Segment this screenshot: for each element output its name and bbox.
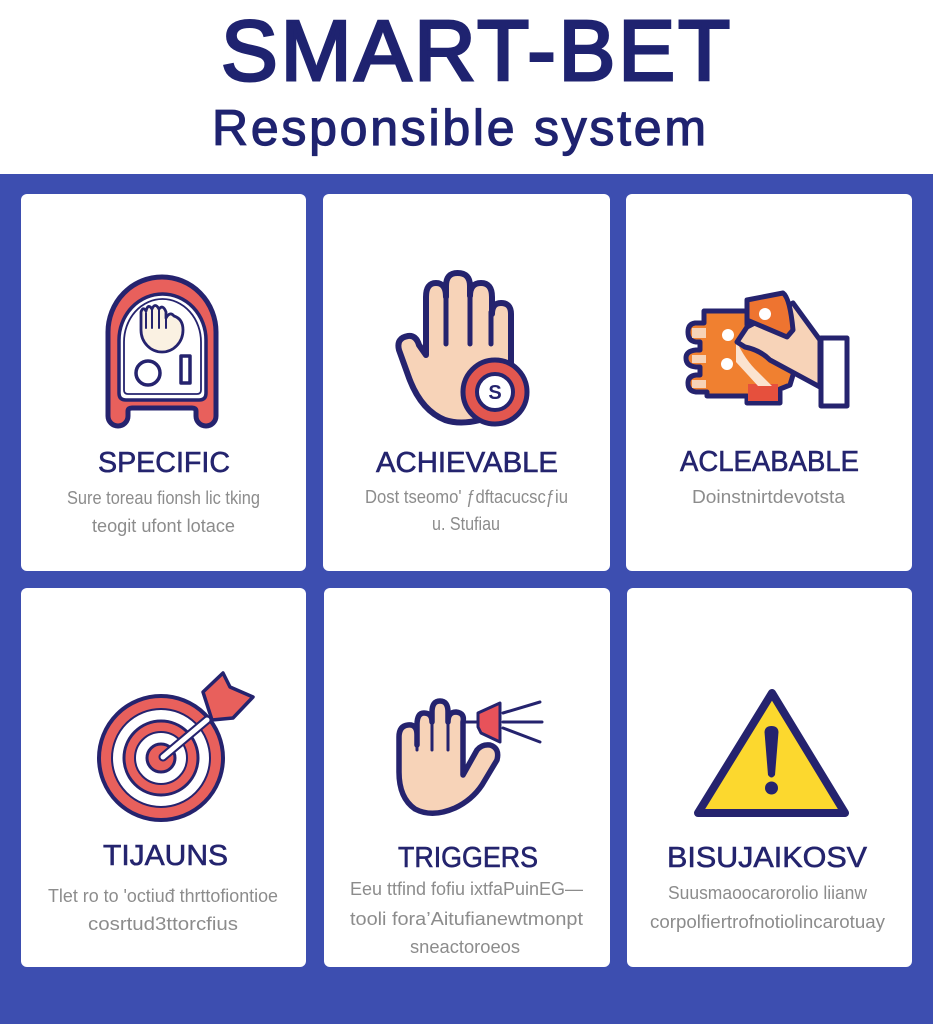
icon: slot machine with hand bbox=[108, 277, 216, 426]
heading: TRIGGERS bbox=[398, 842, 538, 874]
icon: hand with chip bbox=[398, 273, 527, 424]
description: sneactoroeos bbox=[410, 937, 520, 957]
panel: triggers bbox=[324, 588, 610, 967]
panel: warning bbox=[627, 588, 912, 967]
heading: ACHIEVABLE bbox=[376, 447, 558, 479]
panel: target bbox=[21, 588, 306, 967]
description: Tlet ro to 'octiuđ thrttofiontioe bbox=[48, 886, 278, 906]
description bbox=[650, 883, 885, 932]
description: cosrtud3ttorcfius bbox=[88, 914, 238, 934]
description bbox=[365, 487, 568, 534]
heading: TIJAUNS bbox=[103, 840, 228, 872]
panel: specific bbox=[21, 194, 306, 571]
icon: fist gripping chip bbox=[686, 293, 847, 406]
panel: achievable bbox=[323, 194, 610, 571]
description: corpolfiertrofnotiolincarotuay bbox=[650, 912, 885, 932]
title: SMART-BET bbox=[221, 4, 730, 99]
description: Suusmaoocarorolio liianw bbox=[668, 883, 868, 903]
description: Eeu ttfind fofiu ixtfaPuinEG— bbox=[350, 879, 583, 899]
subtitle: Responsible system bbox=[212, 100, 706, 156]
heading: ACLEABABLE bbox=[680, 446, 859, 478]
description bbox=[67, 488, 260, 536]
description: Sure toreau fionsh lic tking bbox=[67, 488, 260, 508]
icon: hand with megaphone bbox=[399, 701, 542, 813]
panel: actionable bbox=[626, 194, 912, 571]
icon: warning triangle bbox=[698, 693, 845, 813]
description: Doinstnirtdevotsta bbox=[692, 487, 846, 507]
description bbox=[48, 886, 278, 934]
icon: target and arrow bbox=[99, 673, 253, 820]
heading: SPECIFIC bbox=[98, 447, 230, 479]
description: u. Stufiau bbox=[432, 514, 500, 534]
heading: BISUJAIKOSV bbox=[667, 842, 868, 874]
description: Dost tseomo' ƒdftacuсsсƒiu bbox=[365, 487, 568, 507]
description: teogit ufont lotace bbox=[92, 516, 235, 536]
icon: hand with chip: S bbox=[488, 382, 502, 404]
description bbox=[350, 879, 583, 957]
description: tooli fora’Aitufianewtmonpt bbox=[350, 909, 583, 929]
